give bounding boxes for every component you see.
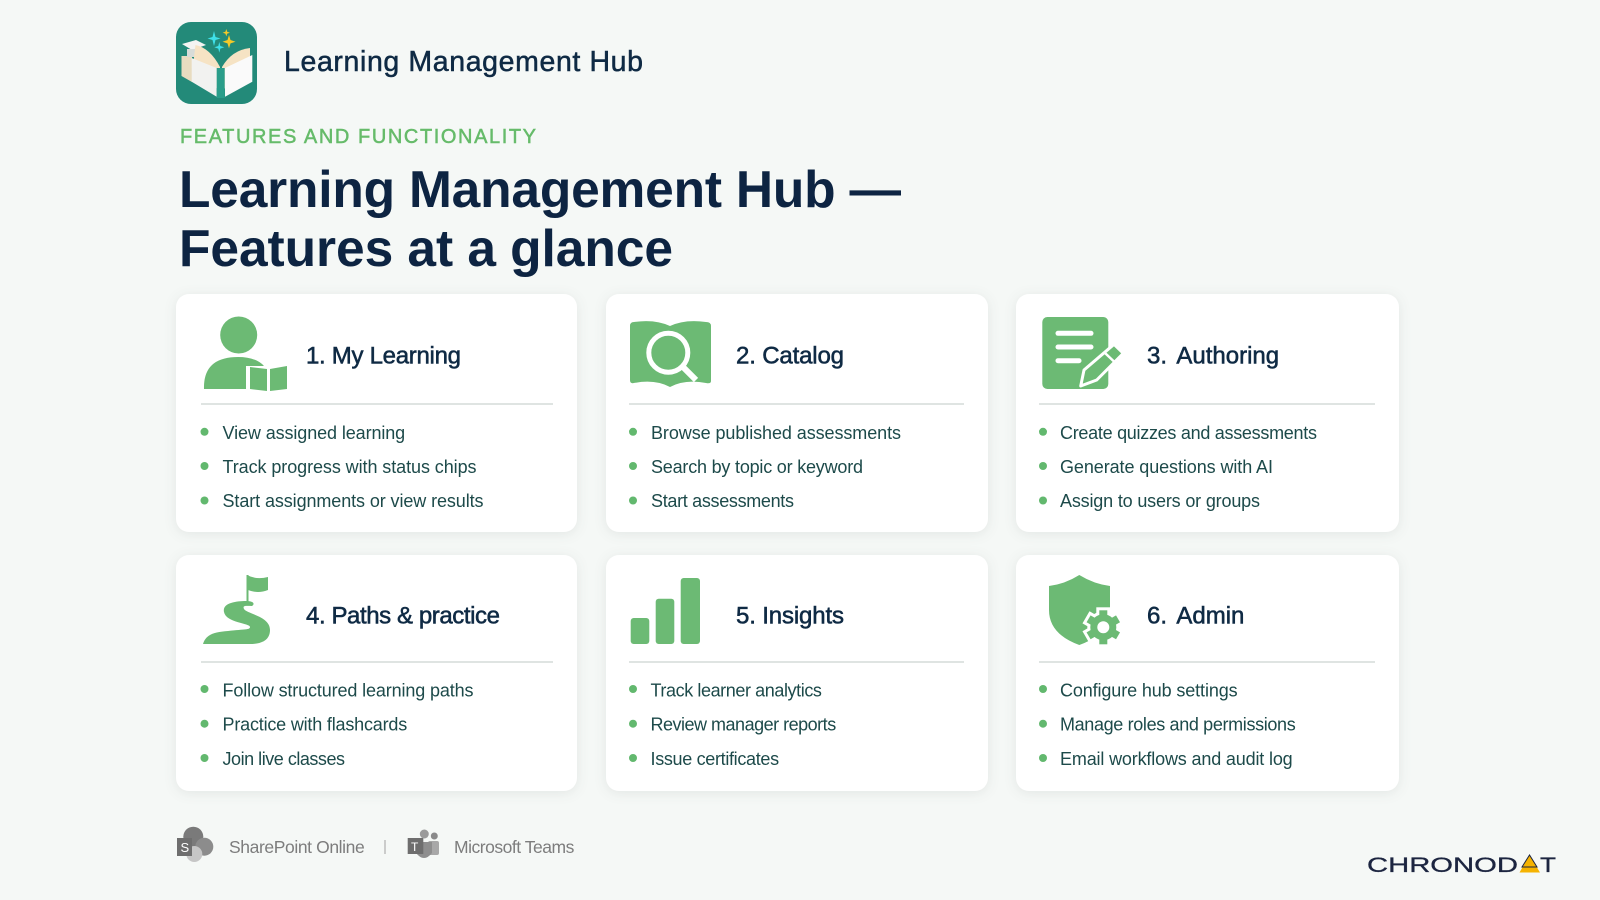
bullet list: Assign to users or groups <box>1060 491 1260 511</box>
bullet list: Track progress with status chips <box>222 457 476 477</box>
heading: 3. Authoring <box>1147 342 1279 370</box>
icon: SharePoint <box>177 827 213 862</box>
footer: Microsoft Teams <box>408 830 575 858</box>
footer: SharePoint Online: SharePoint Online <box>229 837 365 857</box>
bullet list <box>1039 423 1317 511</box>
bullet list <box>1039 680 1296 769</box>
panel: 1. My Learning <box>176 294 577 532</box>
icon: winding path with flag <box>203 575 270 644</box>
icon: bar chart <box>631 578 700 644</box>
footer: Microsoft Teams: Microsoft Teams <box>454 837 575 857</box>
bullet list: Review manager reports <box>650 714 836 734</box>
bullet list <box>629 680 836 769</box>
heading: 4. Paths & practice <box>306 602 500 630</box>
bullet list: Start assignments or view results <box>222 491 484 511</box>
icon: shield with gear <box>1049 575 1120 645</box>
main title: Features at a glance <box>179 219 673 277</box>
icon: person with book <box>204 316 287 391</box>
bullet list: Manage roles and permissions <box>1060 714 1296 734</box>
bullet list <box>200 423 484 511</box>
icon: Teams: T <box>411 840 419 854</box>
bullet list: View assigned learning <box>222 423 405 443</box>
panel: 2. Catalog <box>606 294 988 532</box>
bullet list: Join live classes <box>222 749 345 769</box>
heading: 5. Insights <box>736 602 844 630</box>
main title: Learning Management Hub — <box>179 160 902 218</box>
heading: 2. Catalog <box>736 342 844 370</box>
bullet list: Follow structured learning paths <box>222 680 474 700</box>
panel: 3. Authoring <box>1016 294 1399 532</box>
kicker: features and functionality: FEATURES AND FUNCTIONALITY <box>180 126 536 148</box>
panel: 6. Admin <box>1016 555 1399 791</box>
icon: book with magnifier <box>630 321 711 387</box>
bullet list: Track learner analytics <box>650 680 822 700</box>
bullet list: Create quizzes and assessments <box>1060 423 1317 443</box>
icon: SharePoint: S <box>180 840 190 855</box>
footer: SharePoint Online <box>177 827 365 862</box>
Chronodat logo: CHRONOD <box>1367 853 1518 877</box>
bullet list: Generate questions with AI <box>1060 457 1273 477</box>
icon: Teams <box>408 830 439 858</box>
bullet list: Search by topic or keyword <box>651 457 863 477</box>
bullet list <box>629 423 901 511</box>
icon: document with pencil <box>1042 317 1123 389</box>
header logo: open book app icon <box>176 22 257 104</box>
Chronodat logo: T <box>1540 853 1556 877</box>
Chronodat logo <box>1367 853 1556 877</box>
bullet list <box>200 680 474 769</box>
panel: 5. Insights <box>606 555 988 791</box>
header app name: Learning Management Hub <box>284 46 643 78</box>
heading: 1. My Learning <box>306 342 461 370</box>
bullet list: Practice with flashcards <box>222 714 407 734</box>
bullet list: Start assessments <box>651 491 794 511</box>
bullet list: Configure hub settings <box>1060 680 1238 700</box>
panel: 4. Paths & practice <box>176 555 577 791</box>
main title <box>179 160 902 277</box>
bullet list: Issue certificates <box>650 749 779 769</box>
bullet list: Email workflows and audit log <box>1060 749 1293 769</box>
bullet list: Browse published assessments <box>651 423 901 443</box>
heading: 6. Admin <box>1147 602 1244 630</box>
